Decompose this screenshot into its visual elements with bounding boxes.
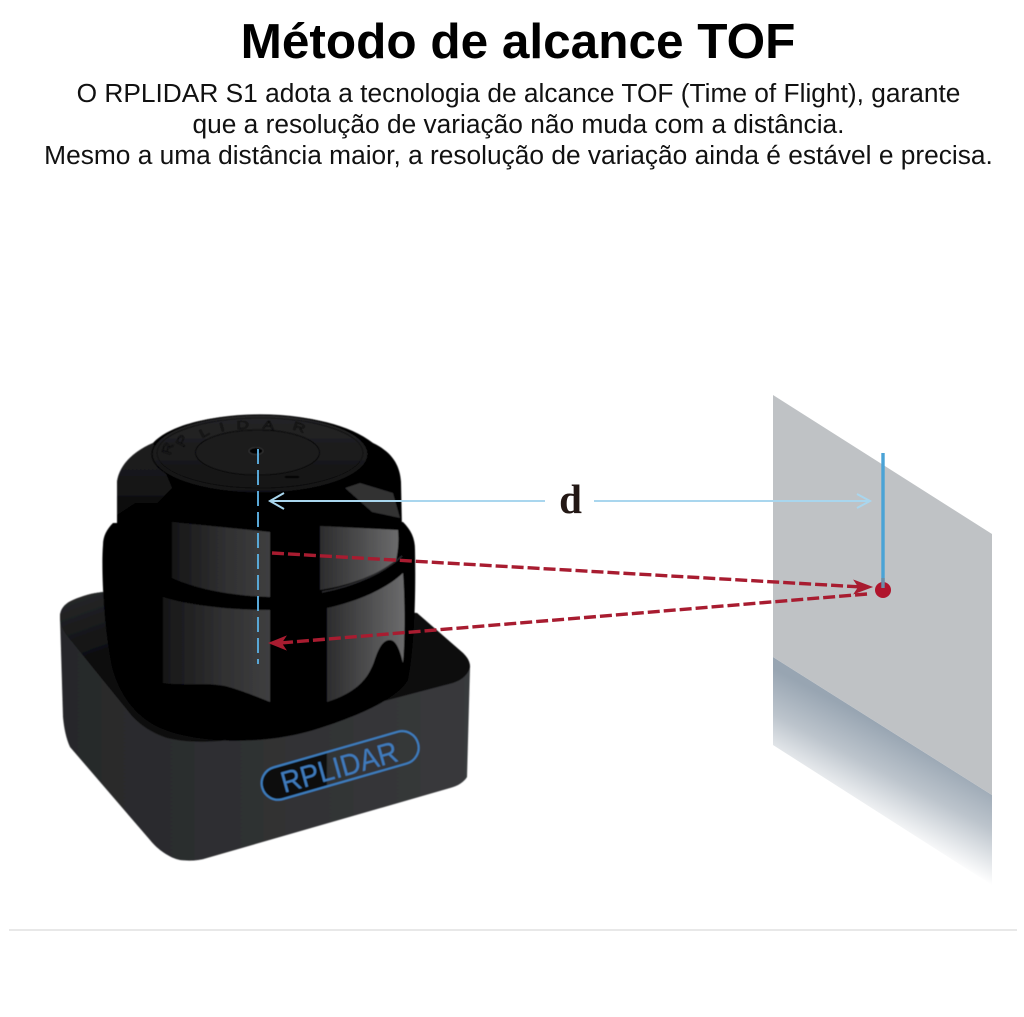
TOF ranging diagram (9, 395, 1017, 931)
distance arrow (270, 493, 870, 509)
returning laser arrow (270, 594, 867, 649)
lid disc (152, 415, 368, 493)
upper cylinder gloss right (320, 526, 398, 590)
title: Método de alcance TOF (241, 14, 795, 69)
base top surface (60, 592, 470, 742)
engraved brand on lid: R (291, 420, 307, 436)
badge outline (258, 727, 423, 804)
flange rim highlight (322, 556, 402, 592)
grey wall (773, 395, 992, 795)
intro text block (44, 78, 993, 170)
engraved brand on lid: R (159, 441, 177, 457)
intro text block: que a resolução de variação não muda com a distância. (192, 109, 844, 139)
engraved brand on lid: L (197, 425, 212, 441)
wall shadow gradient (773, 657, 992, 885)
upper cylinder (117, 415, 402, 600)
badge text: RPLIDAR (277, 736, 402, 800)
laser target point (875, 582, 891, 598)
wall line over point (881, 578, 885, 588)
device base (60, 592, 470, 861)
engraved brand on lid: P (173, 433, 192, 450)
RPLIDAR device (60, 415, 470, 861)
distance label d: d (559, 476, 582, 522)
lid top (152, 415, 368, 493)
intro text block: Mesmo a uma distância maior, a resolução de variação ainda é estável e precisa. (44, 140, 993, 170)
lower cylinder gloss right (327, 573, 404, 702)
outgoing laser arrow (272, 553, 871, 593)
lid shoulder left (117, 443, 172, 515)
engraved brand on lid (159, 419, 307, 457)
left segment (270, 493, 545, 509)
lower cylinder gloss left (163, 597, 270, 702)
engraved brand on lid: A (262, 419, 275, 433)
lower cylinder and flange (102, 522, 415, 741)
upper cylinder gloss left (172, 522, 270, 597)
vertical axis line on device (257, 449, 259, 664)
lid inner ring (196, 430, 320, 475)
wall panel with shadow (773, 395, 992, 885)
badge dark left fill (262, 753, 328, 799)
intro text block: O RPLIDAR S1 adota a tecnologia de alcance TOF (Time of Flight), garante (77, 78, 960, 108)
right segment (594, 494, 870, 508)
ground line (9, 929, 1017, 931)
lens hole (249, 448, 263, 454)
brand badge on base (260, 729, 420, 802)
indicator slot (285, 476, 299, 478)
lid shoulder right highlight (345, 483, 400, 518)
engraved brand on lid: D (236, 419, 249, 433)
engraved brand on lid: I (218, 421, 226, 435)
wall measuring line (881, 453, 885, 590)
